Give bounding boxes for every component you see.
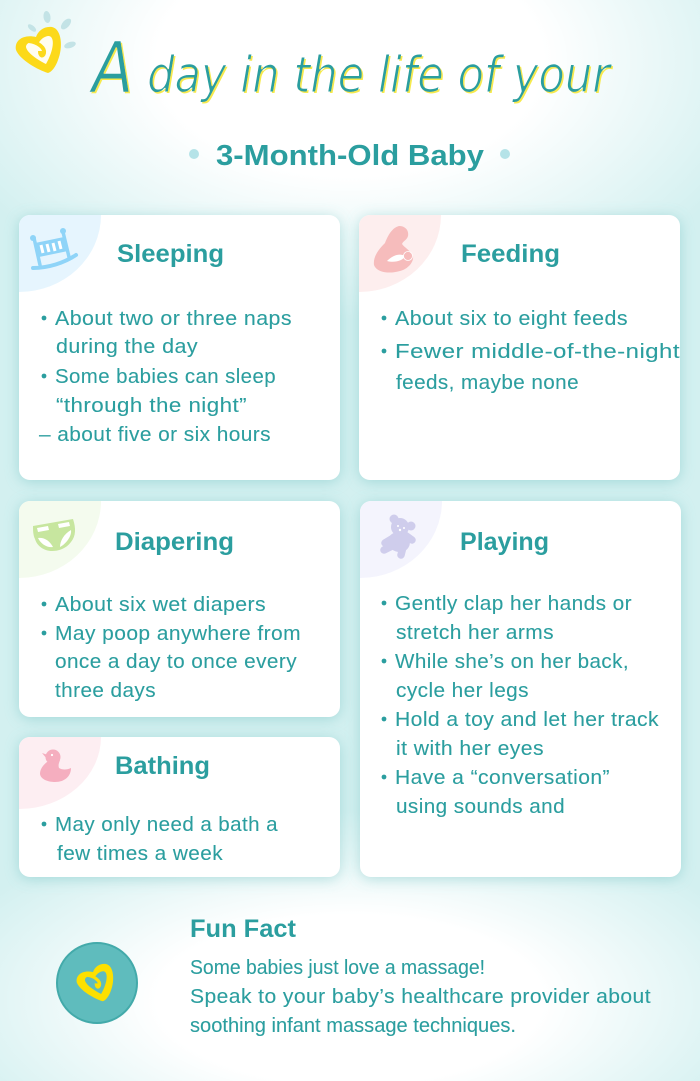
list: diapering: once a day to once every — [55, 651, 297, 673]
list: bathing: few times a week — [57, 843, 224, 865]
list: bathing: May only need a bath a — [55, 814, 278, 836]
list: sleeping: About two or three naps — [55, 308, 292, 330]
list: feeding — [382, 308, 680, 394]
list: playing: stretch her arms — [396, 622, 554, 644]
list: playing: it with her eyes — [396, 738, 544, 760]
icon: mother feeding baby — [374, 226, 413, 273]
list: sleeping: “through the night” — [56, 395, 247, 417]
icon: teddy bear — [384, 514, 416, 555]
heading: sleeping: Sleeping — [117, 240, 224, 268]
fun fact text — [190, 957, 651, 1037]
list: diapering: May poop anywhere from — [55, 623, 301, 645]
list: diapering: three days — [55, 680, 156, 702]
icon: crib — [30, 228, 76, 268]
list: playing: using sounds and — [396, 796, 565, 818]
panel: playing — [353, 496, 688, 886]
panel: diapering — [12, 496, 346, 726]
panel: sleeping — [12, 210, 347, 488]
fun fact text: Some babies just love a massage! — [190, 957, 485, 979]
icon: heart badge — [57, 943, 137, 1023]
heading: diapering: Diapering — [115, 528, 234, 556]
panel: feeding — [352, 210, 686, 488]
list: playing — [382, 593, 660, 818]
list: playing: Hold a toy and let her track — [395, 709, 660, 731]
list: sleeping: Some babies can sleep — [55, 366, 276, 388]
list: playing: While she’s on her back, — [395, 651, 629, 673]
list: playing: cycle her legs — [396, 680, 529, 702]
heading: bathing: Bathing — [115, 752, 210, 780]
list: sleeping: during the day — [56, 336, 198, 358]
list: playing: Have a “conversation” — [395, 767, 610, 789]
list: sleeping: – about five or six hours — [39, 424, 271, 446]
list: feeding: feeds, maybe none — [396, 372, 579, 394]
title: A day in the life of your — [89, 27, 613, 109]
heading: feeding: Feeding — [461, 240, 560, 268]
list: bathing — [42, 814, 278, 865]
list: diapering — [42, 594, 301, 702]
list: playing: Gently clap her hands or — [395, 593, 632, 615]
icon: rubber duck — [40, 750, 71, 782]
fun fact heading: Fun Fact — [190, 915, 297, 943]
list: feeding: About six to eight feeds — [395, 308, 628, 330]
fun fact text: soothing infant massage techniques. — [190, 1015, 516, 1037]
icon: diaper — [33, 519, 75, 551]
list: diapering: About six wet diapers — [55, 594, 266, 616]
heading: playing: Playing — [460, 528, 549, 556]
list: feeding: Fewer middle-of-the-night — [395, 341, 680, 363]
list: sleeping — [39, 308, 292, 446]
panel: bathing — [12, 732, 347, 886]
subtitle: 3-Month-Old Baby — [216, 140, 484, 172]
logo: yellow heart with rays — [16, 11, 77, 73]
fun fact text: Speak to your baby’s healthcare provider about — [190, 986, 651, 1008]
